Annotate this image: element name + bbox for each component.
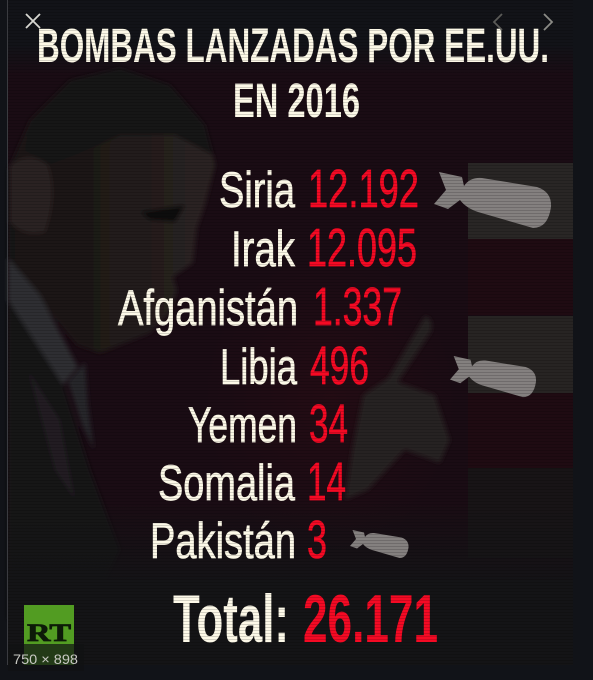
total: [173, 581, 438, 657]
country labels: Libia: [220, 339, 297, 395]
photo: man in profile: [8, 68, 450, 620]
country labels: Irak: [231, 221, 296, 277]
bomb counts: 14: [307, 452, 346, 512]
bomb counts: 496: [310, 336, 369, 396]
RT logo: RT: [27, 620, 71, 647]
title: EN 2016: [233, 75, 360, 128]
bomb counts: [307, 159, 419, 570]
bomb counts: 34: [309, 394, 348, 454]
country labels: Yemen: [188, 397, 297, 453]
country labels: Pakistán: [150, 513, 296, 569]
total: 26.171: [303, 581, 438, 657]
icon: small bomb: [350, 530, 409, 558]
total: Total:: [173, 581, 289, 657]
title: [37, 20, 549, 128]
country labels: Siria: [219, 162, 295, 218]
icon: medium bomb: [450, 356, 536, 397]
country labels: [118, 162, 298, 569]
RT logo: [24, 605, 74, 665]
bomb counts: 12.192: [308, 159, 419, 219]
image dimensions badge: 750 × 898: [13, 652, 78, 667]
left frame line: [7, 0, 8, 665]
country labels: Somalia: [158, 455, 295, 511]
flag stripes: [468, 163, 573, 558]
bomb counts: 1.337: [313, 277, 402, 337]
icon: large bomb: [434, 172, 551, 228]
bomb icons: [350, 172, 551, 558]
country labels: Afganistán: [118, 280, 298, 336]
bomb counts: 12.095: [307, 218, 417, 278]
navigation arrows: [494, 14, 552, 30]
close icon: [26, 14, 40, 28]
image dimensions badge: [8, 644, 84, 671]
bomb counts: 3: [307, 510, 327, 570]
